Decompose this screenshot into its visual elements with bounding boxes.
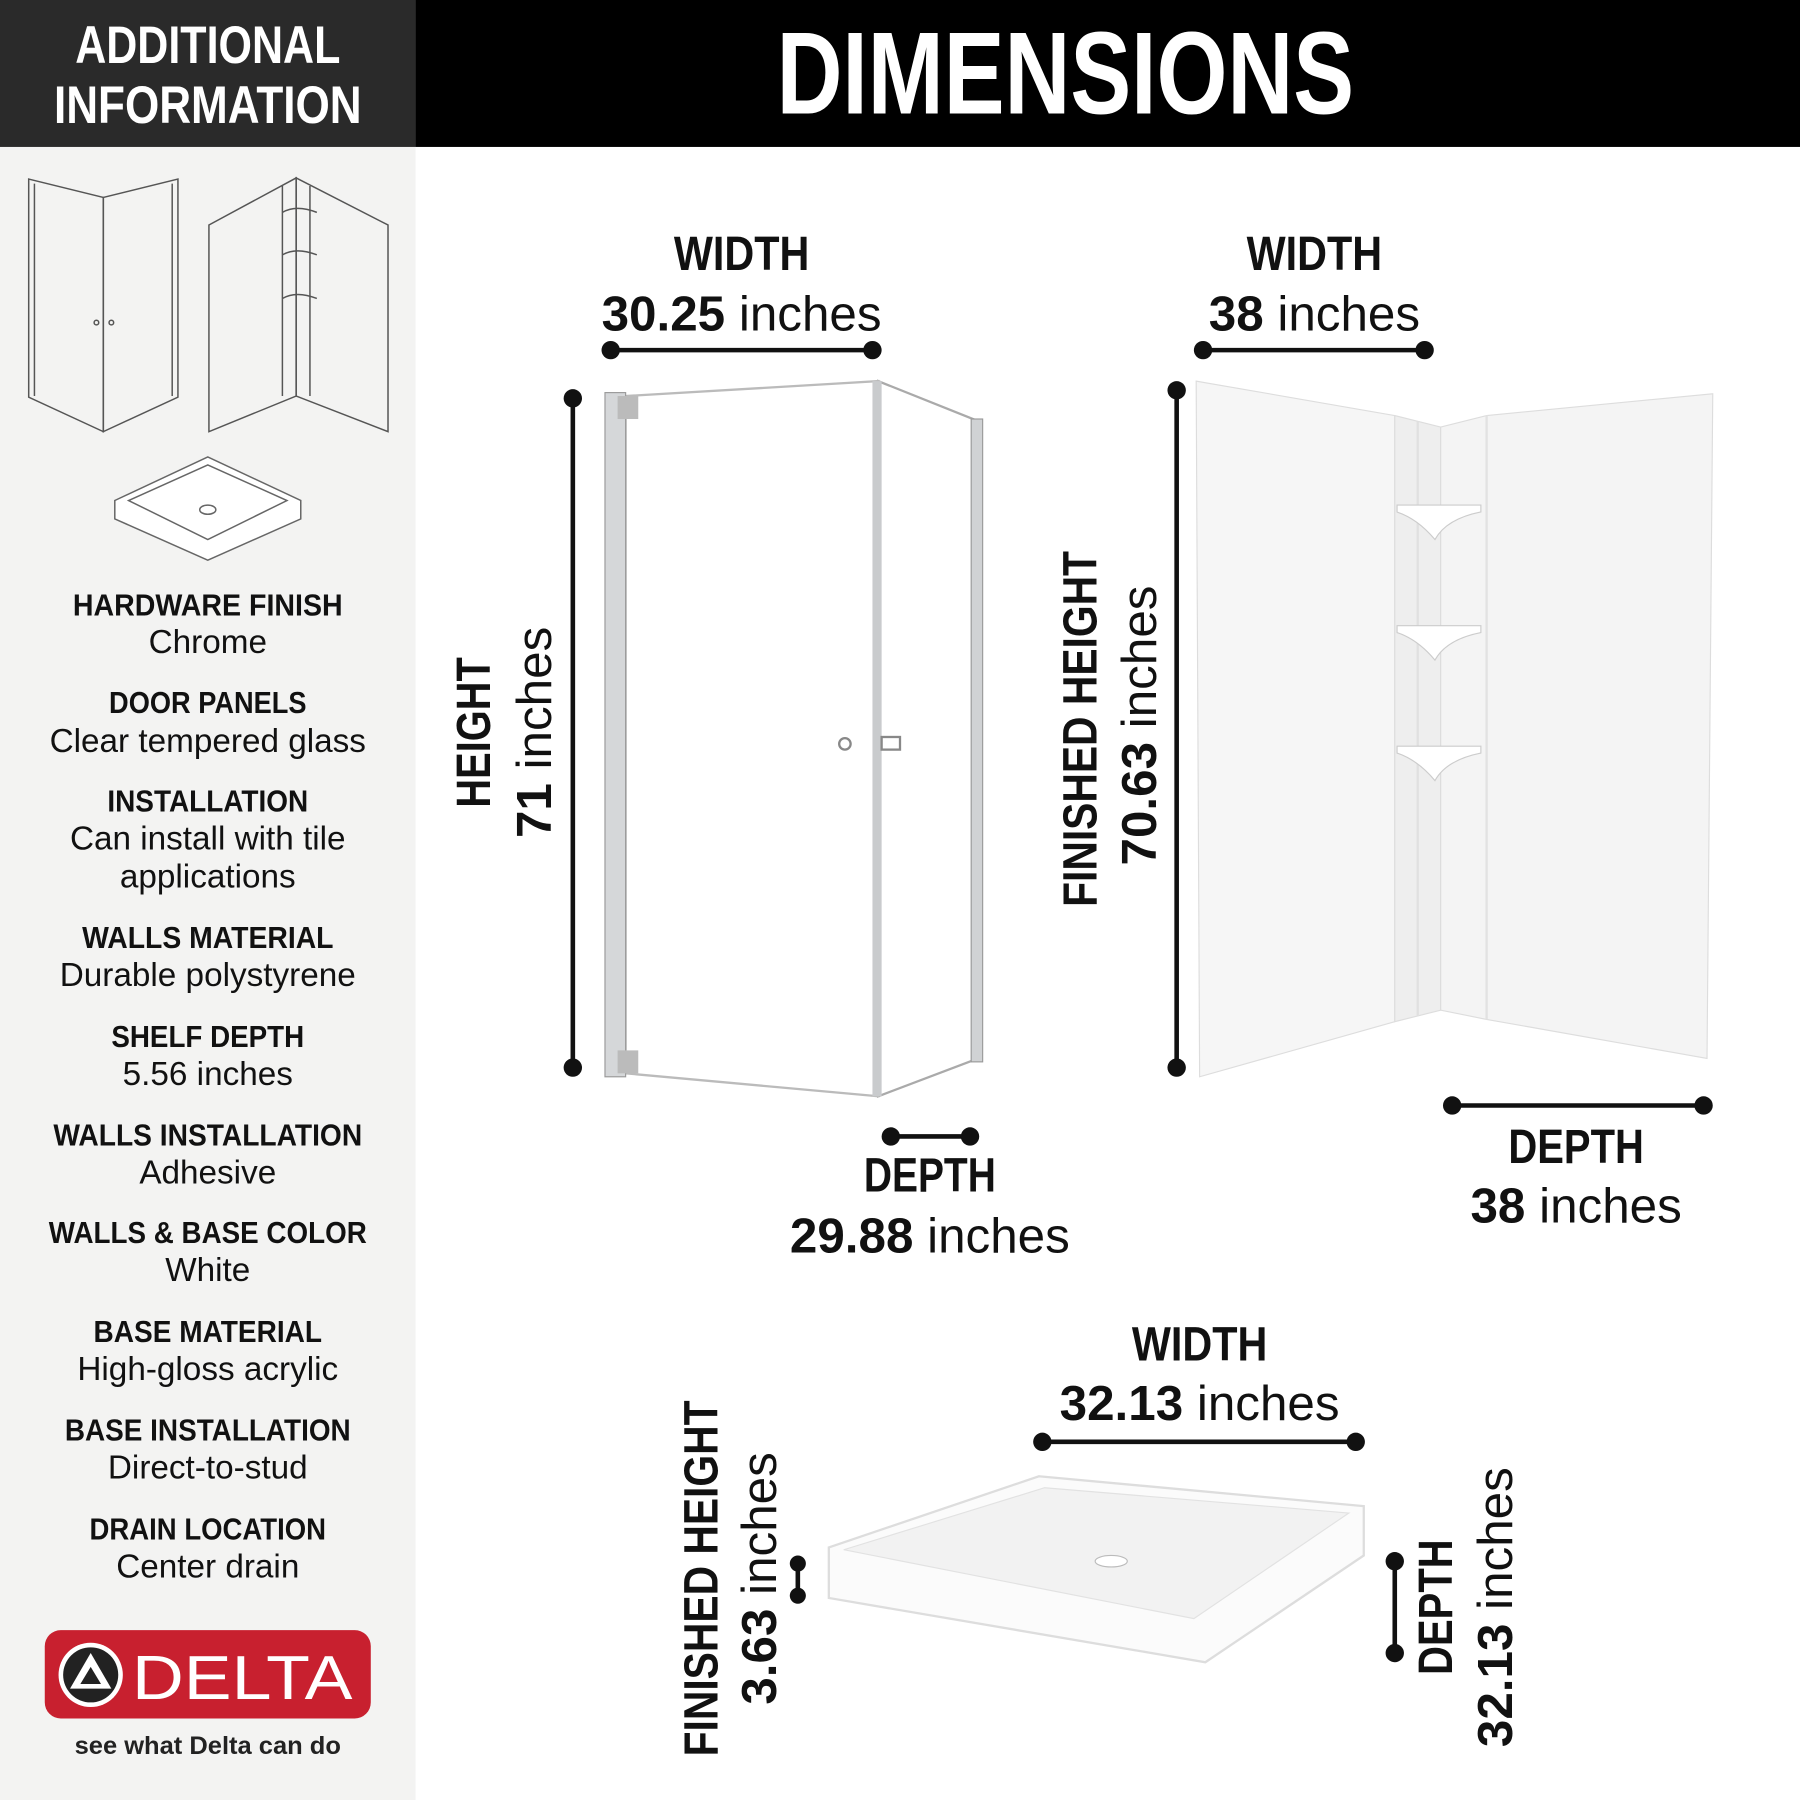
sidebar header	[0, 0, 416, 147]
walls: finished height label	[1053, 381, 1186, 1077]
spec list: HARDWARE FINISH	[73, 587, 343, 622]
walls: depth label: 38 inches	[1470, 1179, 1682, 1234]
spec list: INSTALLATION	[107, 784, 308, 819]
title banner	[416, 0, 1800, 147]
door: width label	[602, 227, 882, 359]
spec list: BASE INSTALLATION	[65, 1413, 351, 1448]
spec list: Clear tempered glass	[50, 723, 366, 760]
spec list: High-gloss acrylic	[77, 1351, 338, 1388]
spec list	[49, 587, 367, 1585]
walls: width label: WIDTH	[1247, 227, 1382, 281]
spec list: White	[165, 1252, 250, 1289]
spec list: SHELF DEPTH	[111, 1019, 304, 1054]
door: width label: 30.25 inches	[602, 287, 882, 342]
spec list: DOOR PANELS	[109, 685, 307, 720]
delta logo	[45, 1630, 371, 1760]
spec list: Chrome	[149, 624, 267, 661]
spec list: Direct-to-stud	[108, 1450, 308, 1487]
spec list: Adhesive	[139, 1155, 276, 1192]
base: width label: WIDTH	[1132, 1317, 1267, 1371]
base: finished height label: FINISHED HEIGHT	[674, 1401, 728, 1756]
base: depth label	[1386, 1467, 1523, 1747]
walls: depth label: DEPTH	[1508, 1120, 1644, 1174]
door: depth label	[790, 1127, 1070, 1263]
title banner: DIMENSIONS	[777, 8, 1354, 139]
base: finished height label: 3.63 inches	[732, 1452, 787, 1705]
spec list: 5.56 inches	[123, 1056, 293, 1093]
sidebar header: ADDITIONAL	[75, 16, 340, 75]
spec list: WALLS MATERIAL	[82, 920, 333, 955]
thumbnail: base	[115, 457, 301, 560]
spec list: Durable polystyrene	[60, 957, 356, 994]
walls: finished height label: 70.63 inches	[1112, 586, 1167, 865]
walls: width label: 38 inches	[1209, 287, 1420, 342]
shower base illustration	[829, 1476, 1364, 1662]
base: depth label: 32.13 inches	[1468, 1467, 1523, 1747]
door: height label	[447, 389, 582, 1077]
door: height label: 71 inches	[507, 627, 562, 838]
door: depth label: DEPTH	[864, 1149, 996, 1203]
base: finished height label	[674, 1401, 806, 1756]
thumbnail: door	[29, 179, 178, 432]
spec list: applications	[120, 858, 296, 895]
spec list: WALLS INSTALLATION	[53, 1118, 362, 1153]
sidebar header: INFORMATION	[54, 76, 362, 135]
spec list: BASE MATERIAL	[94, 1314, 322, 1349]
walls: finished height label: FINISHED HEIGHT	[1053, 551, 1107, 907]
spec list: Can install with tile	[70, 820, 346, 857]
walls illustration	[1196, 381, 1713, 1077]
spec list: DRAIN LOCATION	[90, 1511, 326, 1546]
walls: depth label	[1443, 1096, 1713, 1234]
base: width label	[1033, 1317, 1365, 1451]
sidebar background	[0, 0, 416, 1800]
shower door illustration	[605, 381, 983, 1096]
spec list: WALLS & BASE COLOR	[49, 1215, 367, 1250]
door: width label: WIDTH	[674, 227, 809, 281]
door: depth label: 29.88 inches	[790, 1208, 1070, 1263]
base: depth label: DEPTH	[1409, 1539, 1463, 1675]
thumbnail: walls	[209, 178, 388, 432]
walls: width label	[1194, 227, 1434, 359]
spec list: Center drain	[116, 1548, 299, 1585]
delta logo: see what Delta can do	[75, 1732, 341, 1760]
door: height label: HEIGHT	[447, 657, 501, 808]
delta logo: DELTA	[132, 1644, 353, 1713]
base: width label: 32.13 inches	[1060, 1376, 1340, 1431]
